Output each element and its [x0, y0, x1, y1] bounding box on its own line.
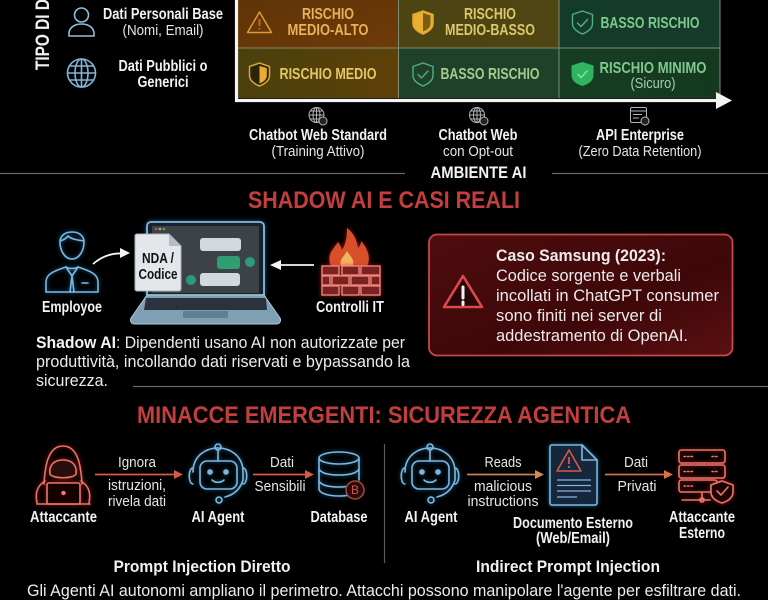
- icon: half shield: [250, 63, 270, 86]
- arrow text: dati sensibili: [254, 454, 306, 495]
- label: documento esterno: (Web/Email): [536, 530, 610, 547]
- cell: rischio medio-alto: RISCHIO: [302, 6, 354, 23]
- callout: caso samsung: Caso Samsung (2023):: [496, 246, 666, 265]
- arrow text: ignora istruzioni: istruzioni,: [108, 477, 166, 494]
- text: shadow AI description: produttività, incollando dati riservati e bypassando la: [36, 352, 411, 371]
- arrow text: dati privati: [618, 454, 656, 495]
- cell: rischio minimo: [559, 48, 720, 98]
- icon: half shield: [413, 11, 433, 34]
- document: NDA / Codice: NDA /: [142, 251, 174, 267]
- arrow text: reads malicious instructions: instructions: [468, 493, 538, 510]
- cell: rischio medio-basso: MEDIO-BASSO: [445, 22, 535, 39]
- diagram: prompt injection diretto: [30, 444, 368, 576]
- icon: external document: [550, 445, 597, 505]
- row label: dati personali base: (Nomi, Email): [122, 22, 204, 39]
- arrow text: dati privati: Dati: [624, 454, 648, 471]
- label: attaccante: Attaccante: [30, 509, 97, 526]
- text: shadow AI description: Shadow AI: Dipendenti usano AI non autorizzate per: [36, 333, 405, 352]
- column label: api enterprise: API Enterprise: [596, 127, 684, 144]
- row label: dati personali base: Dati Personali Base: [103, 6, 223, 23]
- cell: basso rischio top: [559, 0, 720, 48]
- label: attaccante esterno: [669, 509, 735, 542]
- icon: AI agent: [189, 444, 247, 503]
- arrow: IT to laptop: [270, 260, 314, 270]
- document: NDA / Codice: Codice: [138, 267, 178, 283]
- arrow: agent to document: [467, 470, 544, 479]
- risk matrix: [236, 0, 732, 109]
- label: controlli IT: Controlli IT: [316, 299, 384, 316]
- callout: caso samsung: addestramento di OpenAI.: [496, 326, 688, 345]
- cell: rischio medio-alto: MEDIO-ALTO: [288, 22, 368, 39]
- heading: shadow AI e casi reali: SHADOW AI E CASI REALI: [248, 187, 520, 214]
- icon: globe: [68, 59, 96, 87]
- callout: caso samsung: Codice sorgente e verbali: [496, 266, 681, 285]
- row label: dati pubblici o generici: Generici: [138, 74, 188, 91]
- icon: solid green shield: [572, 62, 594, 86]
- row label: dati pubblici o generici: Dati Pubblici o: [118, 58, 208, 75]
- icon: outline shield check: [413, 63, 433, 86]
- chat bubbles: [186, 238, 255, 286]
- callout: caso samsung: sono finiti nei server di: [496, 306, 662, 325]
- callout: caso samsung: [429, 234, 732, 356]
- cell: basso rischio bottom: BASSO RISCHIO: [440, 66, 540, 83]
- cell: rischio minimo: (Sicuro): [630, 75, 676, 92]
- icon: warning triangle: [248, 12, 272, 32]
- icon: database: [319, 452, 364, 499]
- icon: server with shield: [679, 450, 733, 503]
- icon: firewall: [322, 228, 380, 295]
- label: documento esterno: [513, 515, 633, 547]
- icon: outline shield check: [572, 11, 592, 34]
- column label: chatbot web opt-out: Chatbot Web: [438, 127, 518, 144]
- caption: indirect prompt injection: Indirect Prompt Injection: [476, 558, 660, 576]
- arrow text: ignora istruzioni: rivela dati: [108, 493, 166, 510]
- arrow text: ignora istruzioni: Ignora: [118, 454, 157, 471]
- arrow text: dati sensibili: Dati: [270, 454, 294, 471]
- label: AI agent: AI Agent: [192, 509, 244, 526]
- arrow text: reads malicious instructions: Reads: [484, 454, 522, 471]
- icon: alert triangle: [444, 276, 482, 307]
- column label: chatbot web standard: (Training Attivo): [272, 143, 365, 160]
- arrow text: dati sensibili: Sensibili: [254, 478, 306, 495]
- arrow: document to attacker: [605, 470, 673, 479]
- laptop: [130, 222, 281, 324]
- label: employee: Employoe: [42, 299, 102, 316]
- label: AI agent: AI Agent: [404, 509, 458, 526]
- cell: rischio medio-basso: [398, 0, 559, 48]
- arrow text: dati privati: Privati: [618, 478, 656, 495]
- cell: basso rischio bottom: [398, 48, 559, 98]
- column label: chatbot web standard: Chatbot Web Standard: [249, 127, 387, 144]
- row label: dati personali base: [69, 6, 223, 39]
- text: shadow AI description: sicurezza.: [36, 371, 108, 390]
- icon: hacker: [36, 446, 90, 504]
- arrow text: ignora istruzioni: [108, 454, 166, 510]
- icon: api panel: [630, 108, 649, 125]
- cell: rischio medio-basso: RISCHIO: [464, 6, 516, 23]
- icon: globe: [309, 108, 327, 125]
- arrow: attacker to agent: [95, 470, 183, 479]
- text: summary: Gli Agenti AI autonomi ampliano il perimetro. Attacchi possono manipolare l'agente per esfiltrare dati.: [27, 581, 741, 600]
- arrow text: reads malicious instructions: malicious: [474, 478, 532, 495]
- document: NDA / Codice: [135, 234, 181, 291]
- icon: employee: [46, 232, 98, 292]
- callout: caso samsung: incollati in ChatGPT consumer: [496, 286, 719, 305]
- column label: api enterprise: [578, 108, 702, 160]
- diagram: indirect prompt injection: [401, 444, 735, 576]
- label: attaccante esterno: Esterno: [679, 525, 725, 542]
- arrow text: reads malicious instructions: [468, 454, 538, 510]
- row label: dati pubblici o generici: [68, 58, 208, 91]
- column label: chatbot web opt-out: [438, 108, 518, 160]
- label: database: Database: [310, 509, 368, 526]
- text: shadow AI description: [36, 333, 411, 390]
- icon: person: [69, 8, 94, 36]
- heading: minacce emergenti: MINACCE EMERGENTI: SICUREZZA AGENTICA: [137, 402, 631, 429]
- cell: basso rischio top: BASSO RISCHIO: [600, 15, 700, 32]
- arrow: employee to document: [93, 248, 130, 264]
- icon: AI agent: [401, 444, 459, 503]
- axes arrow: [236, 0, 732, 109]
- icon: database: B: [351, 483, 359, 497]
- column label: api enterprise: (Zero Data Retention): [578, 143, 702, 160]
- column label: chatbot web opt-out: con Opt-out: [443, 143, 514, 160]
- caption: prompt injection diretto: Prompt Injection Diretto: [114, 558, 290, 576]
- axis title: ambiente AI: AMBIENTE AI: [430, 164, 526, 182]
- cell: rischio medio-alto: [238, 0, 398, 48]
- icon: globe: [470, 108, 488, 125]
- cell: rischio medio: RISCHIO MEDIO: [280, 66, 376, 83]
- label: documento esterno: Documento Esterno: [513, 515, 633, 532]
- label: attaccante esterno: Attaccante: [669, 509, 735, 526]
- column label: chatbot web standard: [249, 108, 387, 160]
- diagram: shadow AI: [42, 222, 384, 324]
- cell: rischio medio: [238, 48, 398, 98]
- cell: rischio minimo: RISCHIO MINIMO: [600, 60, 706, 77]
- arrow: agent to database: [253, 470, 314, 479]
